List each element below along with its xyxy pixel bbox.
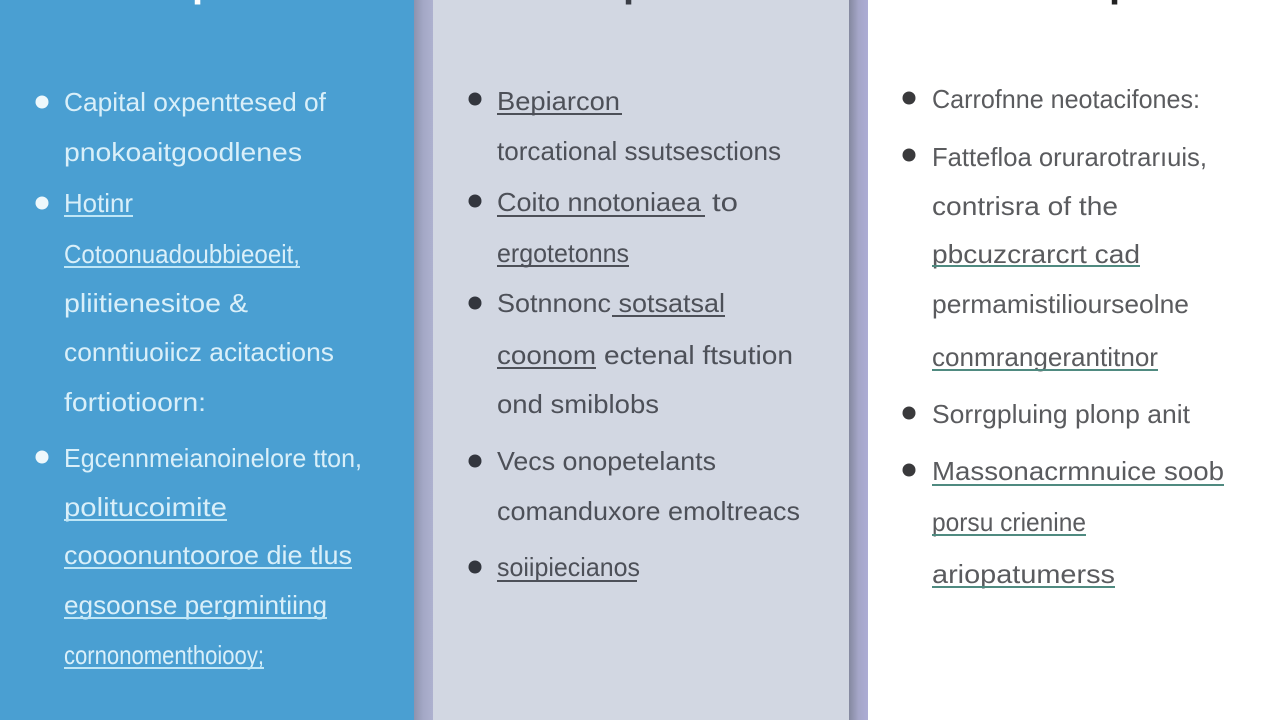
bullet list: left column: conntiuoiicz acitactions bbox=[64, 337, 334, 367]
divider: right gutter bbox=[849, 0, 868, 720]
bullet list: left column: cornonomenthoiooy; bbox=[64, 640, 264, 670]
panel: middle grey column bbox=[433, 0, 849, 720]
bullet list: middle column: Vecs onopetelants bbox=[497, 446, 716, 476]
bullet list: right column: contrisra of the bbox=[932, 191, 1118, 221]
divider: left gutter bbox=[414, 0, 433, 720]
bullet list: right column: Carrofnne neotacifones: bbox=[932, 84, 1200, 114]
bullet list: middle column: ectenal ftsution bbox=[604, 340, 793, 370]
bullet list: middle column: coonom bbox=[497, 340, 596, 370]
bullet list: left column: Capital oxpenttesed of bbox=[64, 87, 327, 117]
bullet list: right column: permamistiliourseolne bbox=[932, 289, 1189, 319]
bullet list: middle column: soiipiecianos bbox=[497, 552, 640, 582]
bullet list: right column: Sorrgpluing plonp anit bbox=[932, 399, 1191, 429]
bullet list: middle column bbox=[468, 86, 800, 582]
bullet list: left column: fortiotioorn: bbox=[64, 387, 206, 417]
bullet list: middle column: Sotnnonc sotsatsal bbox=[497, 288, 725, 318]
bullet list: left column: politucoimite bbox=[64, 492, 227, 522]
bullet list: right column: porsu crienine bbox=[932, 507, 1086, 537]
bullet list: left column bbox=[36, 87, 362, 670]
bullet list: left column: Hotinr bbox=[64, 188, 133, 218]
bullet list: left column: Cotoonuadoubbieoeit, bbox=[64, 239, 300, 269]
bullet list: middle column: ond smiblobs bbox=[497, 389, 659, 419]
panel: right white column bbox=[868, 0, 1280, 720]
bullet list: left column: egsoonse pergmintiing bbox=[64, 590, 327, 620]
bullet list: right column: conmrangerantitnor bbox=[932, 342, 1158, 372]
bullet list: right column bbox=[902, 84, 1224, 589]
panel: left blue column bbox=[0, 0, 414, 720]
bullet list: left column: pnokoaitgoodlenes bbox=[64, 137, 302, 167]
bullet list: middle column: ergotetonns bbox=[497, 238, 629, 268]
bullet list: middle column: torcational ssutsesctions bbox=[497, 136, 781, 166]
bullet list: left column: Egcennmeianoinelore tton, bbox=[64, 443, 362, 473]
bullet list: left column: pliitienesitoe & bbox=[64, 288, 248, 318]
bullet list: right column: pbcuzcrarcrt cad bbox=[932, 239, 1140, 269]
bullet list: right column: Fattefloa orurarotrarıuis, bbox=[932, 142, 1207, 172]
bullet list: middle column: comanduxore emoltreacs bbox=[497, 496, 800, 526]
bullet list: left column: coooonuntooroe die tlus bbox=[64, 540, 352, 570]
bullet list: middle column: Coito nnotoniaea bbox=[497, 187, 702, 217]
bullet list: right column: Massonacrmnuice soob bbox=[932, 456, 1224, 486]
bullet list: middle column: Bepiarcon bbox=[497, 86, 620, 116]
bullet list: right column: ariopatumerss bbox=[932, 559, 1115, 589]
bullet list: middle column: to bbox=[712, 187, 738, 217]
